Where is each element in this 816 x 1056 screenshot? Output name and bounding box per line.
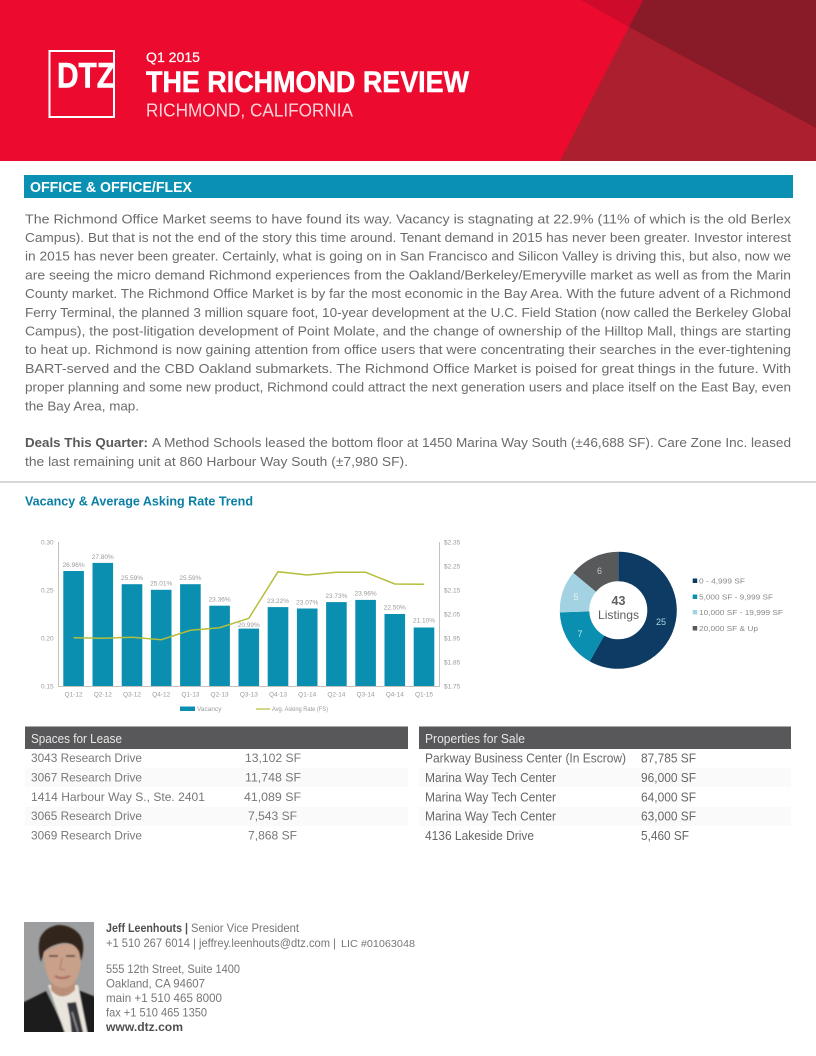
bar value labels: 23.96% <box>355 590 377 598</box>
body paragraph: County market. The Richmond Office Market is by far the most economic in the Bay Area. With the future advent of a Richmond <box>25 286 791 301</box>
table rows: 1414 Harbour Way S., Ste. 2401 <box>31 790 205 804</box>
centre label <box>598 594 639 622</box>
body paragraph: are seeing the micro demand Richmond experiences from the Oakland/Berkeley/Emeryville market as well as from the Marin <box>25 267 791 282</box>
bar value labels: 26.96% <box>63 562 85 569</box>
left axis: 0.15 <box>41 684 54 690</box>
centre label: 43 <box>612 594 625 608</box>
donut legend <box>693 576 783 633</box>
table: spaces for lease <box>25 726 408 842</box>
centre label: Listings <box>598 608 639 622</box>
deals this quarter: Deals This Quarter: <box>25 435 148 450</box>
quarter labels: Q3-12 <box>123 692 141 698</box>
right axis labels: $2.25 <box>444 564 461 570</box>
table rows: 11,748 SF <box>245 770 301 784</box>
deals this quarter: A Method Schools leased the bottom floor at 1450 Marina Way South (±46,688 SF). Care Zone Inc. leased <box>152 435 791 450</box>
bar value labels <box>63 554 435 629</box>
bar value labels: 23.73% <box>325 593 348 600</box>
quarter labels: Q2-13 <box>211 692 229 698</box>
segment values: 7 <box>577 629 583 639</box>
body paragraph: Campus), the post-litigation development of Point Molate, and the change of ownership of the Hilltop Mall, things are starting <box>25 324 791 338</box>
left axis: 0.25 <box>41 588 54 594</box>
left axis: 0.20 <box>41 636 54 642</box>
table rows: 96,000 SF <box>641 771 696 785</box>
body paragraph <box>25 211 792 413</box>
contact details: Jeff Leenhouts | <box>106 921 188 935</box>
right axis labels <box>444 540 461 690</box>
left axis: 0.30 <box>41 540 54 546</box>
body paragraph: the Bay Area, map. <box>25 398 139 413</box>
table rows <box>31 751 301 842</box>
quarter labels: Q2-14 <box>327 692 346 698</box>
asking rate line <box>74 572 424 640</box>
combo chart: vacancy bars and asking rate line <box>41 540 461 713</box>
quarter labels: Q4-13 <box>269 692 287 698</box>
table header: Spaces for Lease <box>31 732 122 746</box>
table rows: 13,102 SF <box>245 751 301 765</box>
right axis labels: $2.05 <box>444 612 461 618</box>
table rows: 87,785 SF <box>641 752 696 766</box>
table header <box>419 726 791 749</box>
table rows <box>425 752 696 843</box>
segment values: 5 <box>573 592 579 602</box>
table rows: 3067 Research Drive <box>31 770 142 784</box>
body paragraph: to heat up. Richmond is now gaining attention from office users that were concentrating their searches in the ever-tightening <box>25 342 791 357</box>
donut legend: 20,000 SF & Up <box>699 624 758 633</box>
vacancy bars <box>63 563 434 686</box>
donut legend: 10,000 SF - 19,999 SF <box>699 608 783 617</box>
deals this quarter <box>25 435 791 469</box>
table rows: 7,868 SF <box>248 828 297 842</box>
logo: DTZ <box>50 51 115 117</box>
table rows: 5,460 SF <box>641 829 689 843</box>
bar value labels: 23.07% <box>296 600 318 606</box>
table rows: 7,543 SF <box>248 809 297 823</box>
quarter labels: Q1-12 <box>65 692 83 698</box>
chart legend <box>180 706 328 713</box>
segment values <box>573 566 666 639</box>
chart legend: Vacancy <box>197 706 222 713</box>
table header <box>25 726 408 749</box>
bar value labels: 25.01% <box>150 580 172 588</box>
contact details: 555 12th Street, Suite 1400 <box>106 962 240 976</box>
bar value labels: 22.50% <box>384 604 406 612</box>
contact details: +1 510 267 6014 | jeffrey.leenhouts@dtz.com | <box>106 936 336 950</box>
table rows: 3069 Research Drive <box>31 828 142 842</box>
table rows: Marina Way Tech Center <box>425 810 556 824</box>
bar value labels: 25.59% <box>179 575 202 582</box>
table rows: 4136 Lakeside Drive <box>425 829 534 843</box>
right axis labels: $1.75 <box>444 684 461 690</box>
table rows: Marina Way Tech Center <box>425 771 556 785</box>
section heading: office & office/flex <box>24 175 793 198</box>
segment values: 6 <box>597 566 602 576</box>
table rows: 3065 Research Drive <box>31 809 142 823</box>
contact details: LIC #01063048 <box>341 938 415 950</box>
logo: DTZ: DTZ <box>57 56 115 96</box>
donut legend: 0 - 4,999 SF <box>699 576 745 586</box>
table rows: 3043 Research Drive <box>31 751 142 765</box>
quarter labels: Q1-14 <box>298 692 317 698</box>
bar value labels: 23.22% <box>267 598 289 605</box>
right axis labels: $2.35 <box>444 540 461 546</box>
table: properties for sale <box>419 726 791 843</box>
quarter labels: Q3-14 <box>357 692 375 698</box>
quarter labels: Q3-13 <box>240 692 258 698</box>
bar value labels: 25.59% <box>121 575 143 582</box>
segment values: 25 <box>656 617 666 627</box>
body paragraph: in 2015 has never been greater. Certainly, what is going on in San Francisco and Silicon Valley is driving this, but also, now we <box>25 249 791 264</box>
donut legend: 5,000 SF - 9,999 SF <box>699 592 773 602</box>
bar value labels: 21.10% <box>413 618 435 624</box>
donut chart: 43 listings <box>573 566 666 654</box>
table rows: 63,000 SF <box>641 810 696 824</box>
contact details: Oakland, CA 94607 <box>106 976 205 990</box>
contact details: www.dtz.com <box>105 1020 183 1034</box>
table rows: Marina Way Tech Center <box>425 790 556 804</box>
right axis labels: $1.85 <box>444 660 461 666</box>
quarter labels: Q1-13 <box>181 692 200 698</box>
left axis <box>41 540 440 690</box>
bar value labels: 20.99% <box>238 622 260 629</box>
contact details: fax +1 510 465 1350 <box>106 1006 207 1020</box>
header banner <box>0 0 816 161</box>
title: THE RICHMOND REVIEW <box>146 66 469 99</box>
quarter labels: Q1-15 <box>415 692 433 698</box>
bar value labels: 23.36% <box>209 596 231 604</box>
quarter labels: Q4-12 <box>152 692 171 698</box>
right axis labels: $1.95 <box>444 636 461 642</box>
subtitle: RICHMOND, CALIFORNIA <box>146 100 353 120</box>
table rows: 64,000 SF <box>641 790 696 804</box>
chart heading: Vacancy & Average Asking Rate Trend <box>25 494 253 508</box>
table header: Properties for Sale <box>425 732 525 746</box>
bar value labels: 27.80% <box>92 554 114 561</box>
portrait photo <box>22 922 96 1036</box>
table rows: Parkway Business Center (In Escrow) <box>425 752 626 766</box>
quarter labels <box>65 692 433 698</box>
contact details: Senior Vice President <box>191 921 300 935</box>
date: Q1 2015 <box>146 49 200 65</box>
chart legend: Avg. Asking Rate (FS) <box>272 706 328 713</box>
body paragraph: proper planning and some new product, Richmond could attract the next generation users and place itself on the East Bay, even <box>25 380 791 395</box>
donut segments <box>575 567 662 654</box>
deals this quarter: the last remaining unit at 860 Harbour Way South (±7,980 SF). <box>25 454 408 469</box>
quarter labels: Q2-12 <box>94 692 112 698</box>
body paragraph: BART-served and the CBD Oakland submarkets. The Richmond Office Market is poised for great things in the future. With <box>25 361 791 376</box>
body paragraph: Campus). But that is not the end of the story this time around. Tenant demand in 2015 has never been greater. Investor interest <box>25 230 791 245</box>
section heading: office & office/flex: OFFICE & OFFICE/FLEX <box>30 180 192 196</box>
right axis labels: $2.15 <box>444 588 461 594</box>
table rows: 41,089 SF <box>244 790 301 804</box>
quarter labels: Q4-14 <box>386 692 404 698</box>
contact details: main +1 510 465 8000 <box>106 991 222 1005</box>
body paragraph: The Richmond Office Market seems to have found its way. Vacancy is stagnating at 22.9% (11% of which is the old Berlex <box>25 211 792 226</box>
body paragraph: Ferry Terminal, the planned 3 million square foot, 10-year development at the U.C. Field Station (now called the Berkeley Global <box>25 305 791 320</box>
contact details <box>105 921 415 1034</box>
